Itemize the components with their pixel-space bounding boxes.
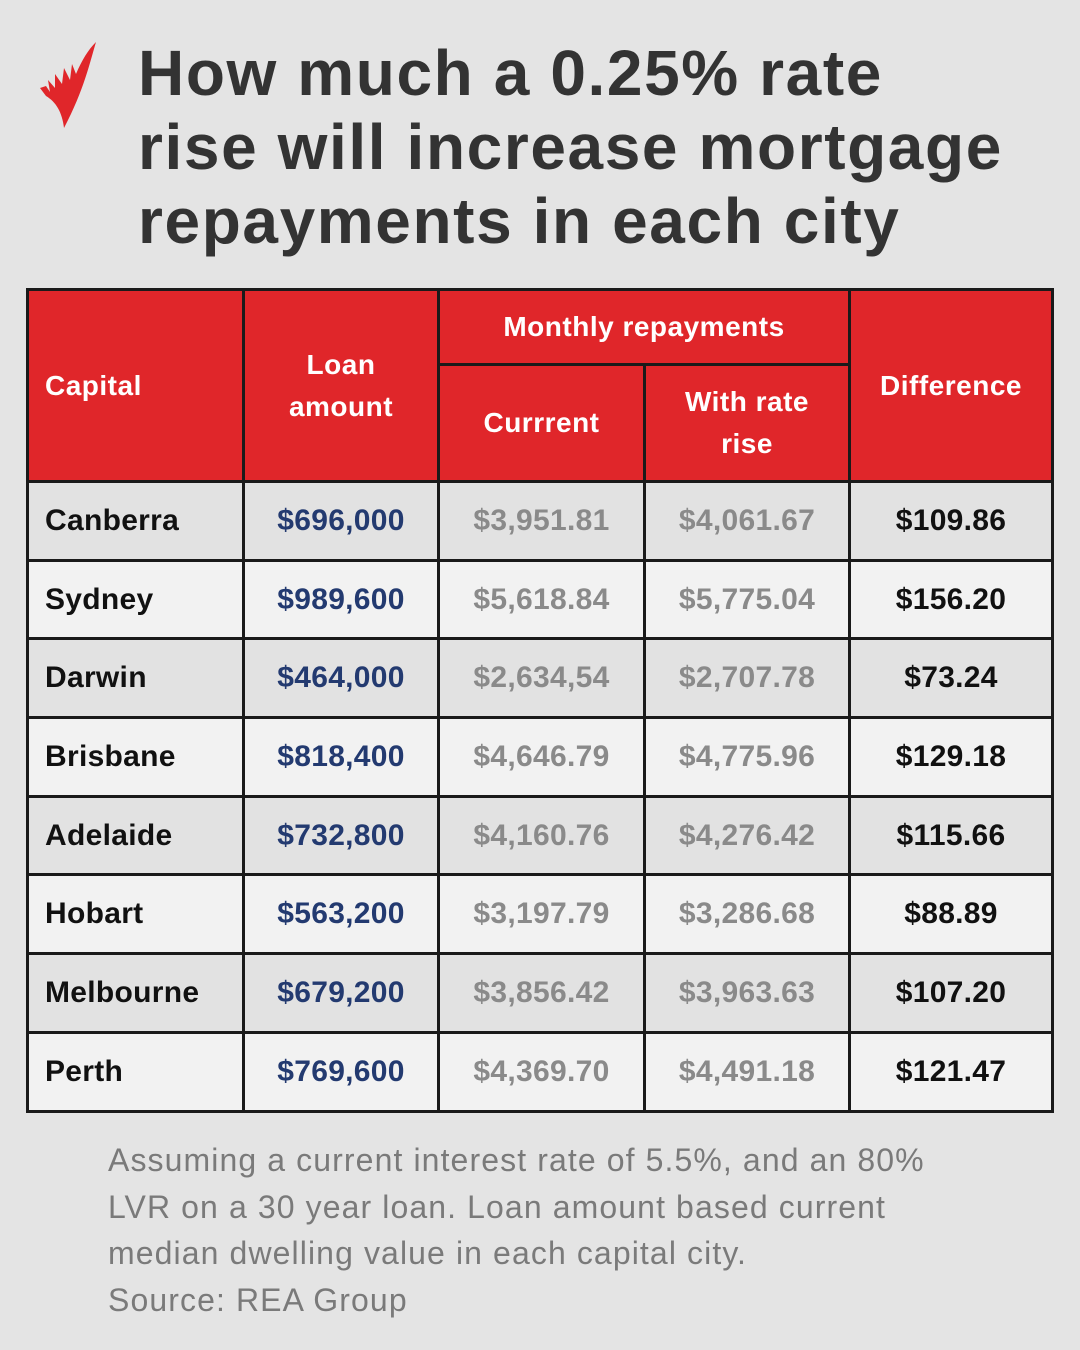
footnote: Assuming a current interest rate of 5.5%, and an 80% <box>108 1142 925 1178</box>
table: Difference <box>880 370 1022 400</box>
table: $4,369.70 <box>473 1055 610 1088</box>
table: $2,707.78 <box>679 661 815 694</box>
table: rise <box>721 428 773 459</box>
table: Brisbane <box>45 740 176 773</box>
table <box>26 288 1054 1113</box>
table: Sydney <box>45 583 154 616</box>
table: $732,800 <box>277 819 405 852</box>
title <box>138 37 1003 257</box>
table: $4,276.42 <box>679 819 815 852</box>
table: Hobart <box>45 897 143 930</box>
footnote: Source: REA Group <box>108 1282 408 1318</box>
table: $679,200 <box>277 976 405 1009</box>
table: Monthly repayments <box>503 311 785 342</box>
table: $107.20 <box>896 976 1006 1009</box>
table: Currrent <box>483 407 600 438</box>
table: $464,000 <box>277 661 405 694</box>
table: $73.24 <box>904 661 998 694</box>
table: Melbourne <box>45 976 199 1009</box>
table: $3,856.42 <box>473 976 610 1009</box>
table: $3,197.79 <box>473 897 610 930</box>
table: $115.66 <box>897 819 1005 852</box>
table: amount <box>289 390 393 422</box>
title: repayments in each city <box>138 185 900 257</box>
table: $5,775.04 <box>679 583 815 616</box>
table: Perth <box>45 1055 123 1088</box>
table: $563,200 <box>277 897 405 930</box>
table: Loan <box>307 348 375 380</box>
table: $156.20 <box>896 583 1006 616</box>
table: $109.86 <box>896 504 1006 537</box>
table: $3,951.81 <box>473 504 610 537</box>
footnote: LVR on a 30 year loan. Loan amount based current <box>108 1188 886 1224</box>
table: $3,286.68 <box>679 897 815 930</box>
table: Canberra <box>45 504 179 537</box>
table: Darwin <box>45 661 147 694</box>
table: $129.18 <box>896 740 1006 773</box>
table: $4,775.96 <box>679 740 815 773</box>
table: $2,634,54 <box>473 661 610 694</box>
table: $818,400 <box>277 740 405 773</box>
table: $989,600 <box>277 583 405 616</box>
table: Adelaide <box>45 819 172 852</box>
table: $3,963.63 <box>679 976 815 1009</box>
table: $88.89 <box>904 897 998 930</box>
table: $4,160.76 <box>473 819 610 852</box>
footnote <box>108 1142 925 1318</box>
table: $5,618.84 <box>473 583 610 616</box>
footnote: median dwelling value in each capital city. <box>108 1235 747 1271</box>
table: $4,061.67 <box>679 504 815 537</box>
title: rise will increase mortgage <box>138 111 1003 183</box>
icon: logo <box>40 42 96 128</box>
table: With rate <box>685 386 809 417</box>
table: $4,491.18 <box>679 1055 815 1088</box>
table: $696,000 <box>277 504 405 537</box>
table: $769,600 <box>277 1055 405 1088</box>
title: How much a 0.25% rate <box>138 37 883 109</box>
table: $121.47 <box>896 1055 1006 1088</box>
table: Capital <box>45 370 142 400</box>
table: $4,646.79 <box>473 740 610 773</box>
